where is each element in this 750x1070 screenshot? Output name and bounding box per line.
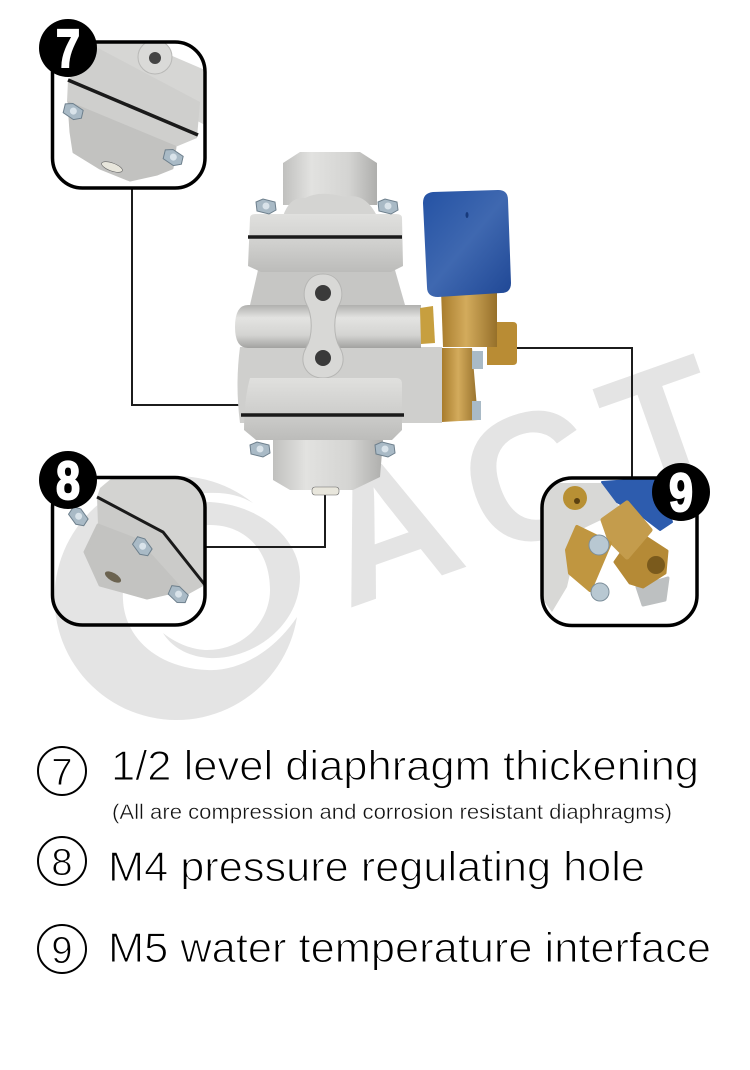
hex nut: [420, 306, 435, 344]
upper O-ring: [248, 235, 402, 239]
bottom plug: [312, 487, 339, 495]
legend item 9: [38, 924, 711, 973]
badge 9: [652, 463, 710, 523]
watermark: ACT letters: ACT: [292, 315, 750, 646]
number 8: [38, 837, 86, 885]
blue solenoid cap: [423, 190, 511, 297]
watermark: inner swirl: [163, 502, 300, 658]
digit: 8: [51, 842, 73, 884]
leader line for callout 8: [205, 493, 325, 547]
silver casting: [543, 483, 622, 612]
O-ring: [97, 497, 205, 585]
diaphragm block: [67, 58, 198, 146]
O-ring: [68, 80, 198, 135]
plug: [105, 571, 121, 583]
callout panel 9: [542, 463, 710, 626]
lower O-ring: [241, 413, 404, 417]
bolts: [66, 504, 191, 606]
neck shoulder: [283, 194, 377, 216]
badge 7: [39, 19, 97, 79]
port hole: [647, 556, 665, 574]
main product: pressure regulator: [235, 152, 517, 495]
upper diaphragm block: [248, 214, 403, 272]
callout panel 8: [39, 451, 205, 625]
nut hole: [574, 498, 580, 504]
note: (All are compression and corrosion resistant diaphragms): [112, 801, 672, 824]
badge disc: [39, 451, 97, 509]
badge disc: [39, 19, 97, 77]
bracket bolts: [472, 351, 483, 420]
upper bolts: [256, 199, 398, 214]
watermark: ACT logo: [54, 315, 750, 720]
watermark: outer swirl: [54, 476, 297, 720]
digit: 9: [51, 930, 73, 972]
cross tube: [235, 305, 421, 348]
bottom cap: [273, 440, 383, 490]
housing: [97, 478, 205, 585]
diaphragm block: [97, 497, 205, 600]
mounting boss: [138, 40, 172, 74]
brass bracket: [567, 527, 610, 590]
number 7: [38, 747, 86, 795]
panel 9 background: [542, 478, 697, 626]
ring: [38, 925, 86, 973]
badge number: 7: [56, 20, 80, 79]
bolts: [589, 535, 609, 601]
mid body: [250, 270, 405, 305]
brass bracket: [442, 348, 478, 422]
panel 9 image: [543, 478, 672, 612]
dog-bone mounting boss: [303, 274, 343, 378]
badge number: 9: [669, 464, 693, 523]
panel 9 frame: [542, 478, 697, 626]
ring: [38, 747, 86, 795]
brass nut: [563, 486, 587, 510]
brass port: [615, 538, 667, 587]
cap: [85, 525, 182, 598]
badge 8: [39, 451, 97, 511]
solenoid marking: [466, 212, 468, 218]
panel 7 frame: [52, 42, 205, 188]
number 9: [38, 925, 86, 973]
top neck: [283, 152, 377, 205]
badge number: 8: [56, 452, 80, 511]
upper housing: [90, 43, 205, 125]
panel 8 image: [66, 478, 205, 606]
callout panel 7: [39, 19, 205, 188]
heading 7: 1/2 level diaphragm thickening: [111, 742, 699, 789]
brass body: [603, 503, 650, 557]
lower diaphragm block: [244, 378, 402, 440]
heading 8: M4 pressure regulating hole: [108, 843, 645, 890]
lower body casting: [238, 347, 442, 423]
bolts: [61, 101, 185, 168]
badge disc: [652, 463, 710, 521]
lower bolts: [250, 442, 395, 457]
mounting holes: [315, 285, 331, 366]
ring: [38, 837, 86, 885]
brass side port: [487, 322, 517, 365]
leader line for callout 9: [516, 348, 632, 480]
silver tip: [637, 578, 668, 605]
leader line for callout 7: [132, 188, 243, 405]
boss hole: [149, 52, 161, 64]
panel 7 image: [61, 40, 205, 180]
heading 9: M5 water temperature interface: [108, 924, 711, 971]
legend item 8: [38, 837, 645, 890]
cap: [69, 103, 175, 180]
digit: 7: [51, 752, 73, 794]
plug: [101, 161, 123, 173]
panel 8 frame: [52, 478, 205, 625]
legend item 7: [38, 742, 699, 824]
blue cap: [602, 478, 672, 530]
brass valve neck: [441, 290, 497, 347]
